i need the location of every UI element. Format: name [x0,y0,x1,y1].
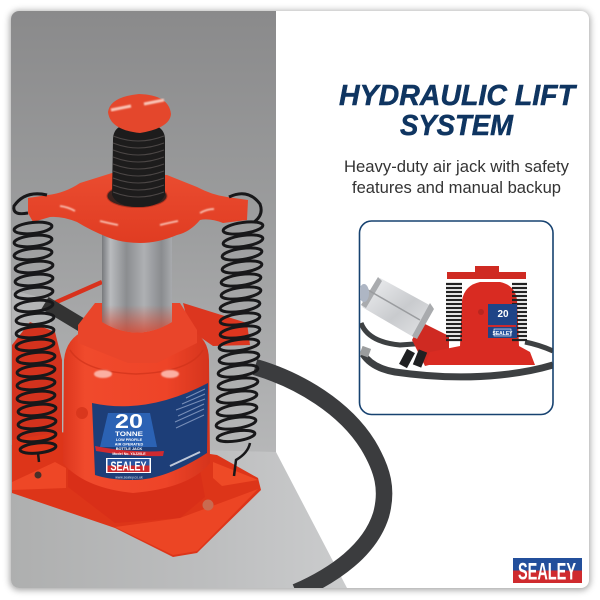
inset: jack label: SEALEY [492,331,513,337]
inset: air cylinder [359,277,434,339]
description: features and manual backup [352,179,561,197]
saddle plate [28,173,248,243]
panel: grey wall [11,11,276,452]
side boss [76,407,88,419]
air hose [255,367,384,592]
jack: base plate [12,432,261,557]
label: product sticker: 20 [115,411,143,433]
jack: body [63,330,210,493]
base: left corner [12,462,66,490]
label: product sticker [92,383,208,480]
inset: spring right [512,284,527,340]
label: product sticker: LOW PROFILE [116,438,143,442]
label: product sticker: AIR OPERATED [115,442,143,446]
jack: rear parts [12,282,250,450]
jack: chrome ram [102,235,172,332]
panel: floor [11,445,347,588]
jack: hex collar [78,303,197,348]
label logo: SEALEY [110,458,147,474]
inset photo panel [359,221,553,414]
saddle highlights [60,206,214,225]
inset: handles [403,351,423,366]
label: product sticker: BOTTLE JACK [116,447,143,451]
base: front corner [115,489,258,555]
right spring [215,194,264,476]
left spring [14,194,56,462]
inset: red connector [412,322,449,366]
inset: jack label: 20 [497,309,509,320]
saddle hole [106,189,168,208]
description: Heavy-duty air jack with safety [344,158,570,176]
inset: rear hoses [361,323,428,345]
label: product sticker: TONNE [115,431,144,438]
description [344,158,570,197]
screw thread [112,125,165,207]
inset: spring left [446,284,462,340]
label: product sticker: www.sealey.co.uk [115,476,143,480]
base: right corner [213,462,258,486]
highlights on body [94,370,179,378]
jack cap [108,94,171,133]
inset: jack [425,266,535,365]
title: SYSTEM [400,110,514,142]
title [339,80,578,142]
inset: front hose [363,354,553,377]
label: product sticker: Model No. YAJ20LE [112,452,146,456]
jack: shoulder line [70,350,203,374]
inset: jack label [488,304,517,338]
base: raised centre [68,470,205,523]
title: HYDRAULIC LIFT [339,80,578,112]
